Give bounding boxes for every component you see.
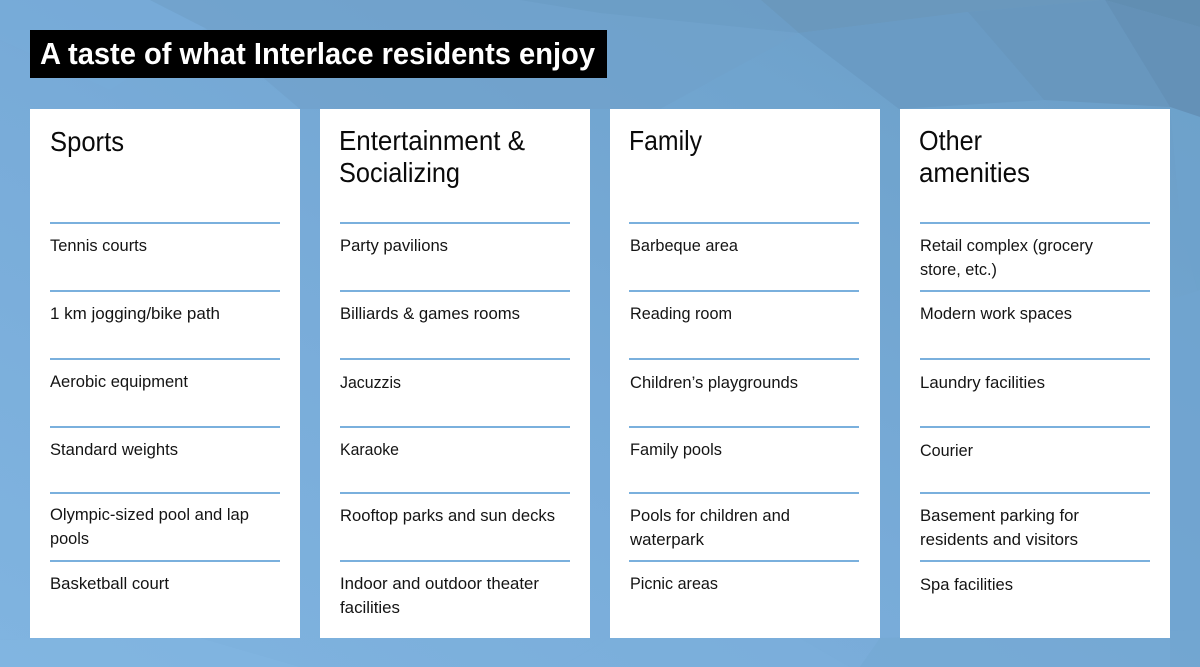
title: A taste of what Interlace residents enjoy	[40, 36, 596, 71]
item: pools and waterpark: waterpark	[629, 530, 704, 549]
item: olympic pool: Olympic-sized pool and lap	[50, 505, 249, 524]
panel: sports	[30, 109, 300, 638]
item: barbeque area: Barbeque area	[630, 236, 739, 255]
item: laundry: Laundry facilities	[920, 373, 1045, 392]
heading: family: Family	[629, 125, 702, 156]
item: pools and waterpark: Pools for children and	[630, 506, 790, 525]
item: courier: Courier	[920, 441, 973, 460]
panel: entertainment and socializing	[320, 109, 590, 638]
item: jacuzzis: Jacuzzis	[340, 373, 401, 392]
heading: other amenities: amenities	[919, 157, 1030, 188]
item: rooftop parks: Rooftop parks and sun decks	[340, 506, 555, 525]
item: retail complex: store, etc.)	[920, 260, 997, 279]
item: basement parking: residents and visitors	[920, 530, 1078, 549]
item: tennis courts: Tennis courts	[50, 236, 147, 255]
item: standard weights: Standard weights	[50, 440, 178, 459]
title	[30, 30, 607, 78]
heading: entertainment and socializing: Socializing	[339, 157, 460, 188]
item: jogging path: 1 km jogging/bike path	[50, 304, 220, 323]
item: spa: Spa facilities	[920, 575, 1013, 594]
heading: entertainment and socializing: Entertainment &	[339, 125, 525, 156]
item: basketball court: Basketball court	[50, 574, 169, 593]
item: reading room: Reading room	[630, 304, 732, 323]
item: theater facilities: facilities	[340, 598, 400, 617]
item: basement parking	[920, 506, 1079, 549]
item: retail complex	[920, 236, 1093, 279]
item: party pavilions: Party pavilions	[340, 236, 448, 255]
item: olympic pool: pools	[50, 529, 89, 548]
heading: other amenities	[919, 125, 1030, 188]
item: basement parking: Basement parking for	[920, 506, 1079, 525]
item: playgrounds: Children’s playgrounds	[630, 373, 798, 392]
item: family pools: Family pools	[630, 440, 722, 459]
item: karaoke: Karaoke	[340, 440, 399, 459]
item: olympic pool	[50, 505, 249, 548]
heading: other amenities: Other	[919, 125, 982, 156]
item: aerobic equipment: Aerobic equipment	[50, 372, 188, 391]
heading: sports: Sports	[50, 126, 124, 157]
item: work spaces: Modern work spaces	[920, 304, 1072, 323]
panel: family	[610, 109, 880, 638]
heading: entertainment and socializing	[339, 125, 525, 188]
item: theater facilities: Indoor and outdoor theater	[340, 574, 539, 593]
item: billiards: Billiards & games rooms	[340, 304, 520, 323]
item: picnic areas: Picnic areas	[630, 574, 718, 593]
item: retail complex: Retail complex (grocery	[920, 236, 1093, 255]
item: pools and waterpark	[629, 506, 790, 549]
panel: other amenities	[900, 109, 1170, 638]
item: theater facilities	[340, 574, 539, 617]
